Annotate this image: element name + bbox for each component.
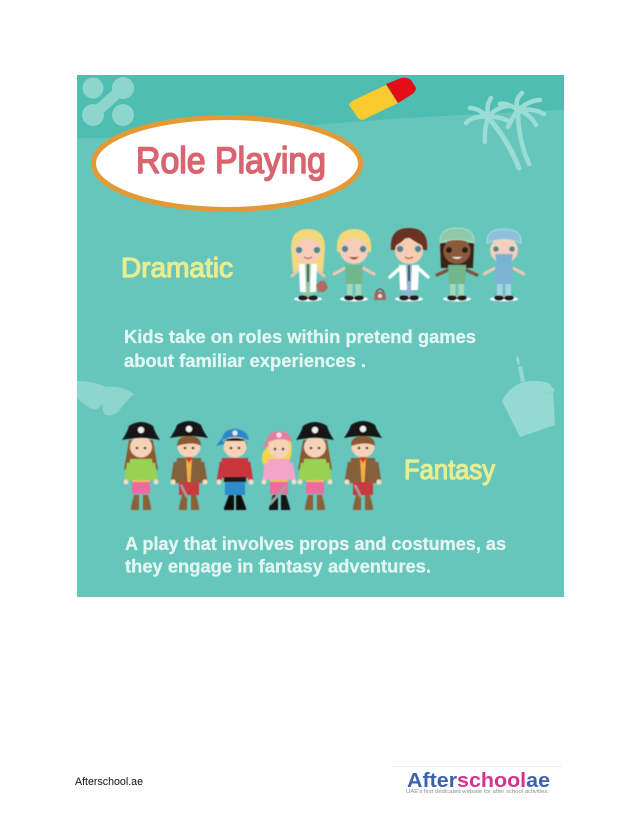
text block: fantasy description	[125, 533, 506, 576]
title: Role Playing	[136, 140, 326, 181]
text block: dramatic description: about familiar experiences .	[124, 350, 366, 371]
heading: Fantasy: Fantasy	[404, 454, 495, 485]
character: pirate boy brown	[170, 421, 208, 510]
character: nurse with green cap	[437, 228, 477, 302]
icon: clover decoration	[82, 77, 134, 126]
character: pirate girl pink	[262, 431, 296, 510]
character: pirate boy red with blue bandana	[216, 429, 254, 510]
text block: fantasy description: A play that involves props and costumes, as	[125, 533, 506, 554]
text block: dramatic description	[124, 326, 476, 371]
doctors group	[291, 228, 524, 302]
character: brown-haired doctor	[390, 228, 428, 302]
heading: Dramatic: Dramatic	[121, 252, 233, 283]
character: pirate boy brown second	[344, 421, 382, 510]
icon: palm trees	[466, 93, 544, 168]
character: blonde girl doctor	[291, 229, 328, 302]
icon: eraser	[349, 78, 416, 120]
text block: dramatic description: Kids take on roles within pretend games	[124, 326, 476, 347]
logo wordmark: Afterschoolae	[407, 770, 550, 792]
logo tagline: UAE's first dedicated website for after school activities.	[406, 789, 550, 795]
pirates group	[122, 421, 382, 510]
character: pirate girl green second	[296, 422, 334, 510]
icon: butterfly	[77, 381, 134, 415]
panel: teal background	[77, 75, 564, 597]
logo: Afterschool.ae	[392, 766, 562, 795]
character: masked surgeon	[484, 229, 524, 302]
footer text: Afterschool.ae	[75, 776, 143, 788]
title badge	[94, 118, 360, 210]
character: blonde boy in scrubs	[334, 229, 374, 302]
character: pirate girl green	[122, 422, 160, 510]
icon: cupcake	[502, 355, 555, 437]
icon: doctor bag	[374, 289, 386, 300]
text block: fantasy description: they engage in fantasy adventures.	[125, 556, 431, 576]
